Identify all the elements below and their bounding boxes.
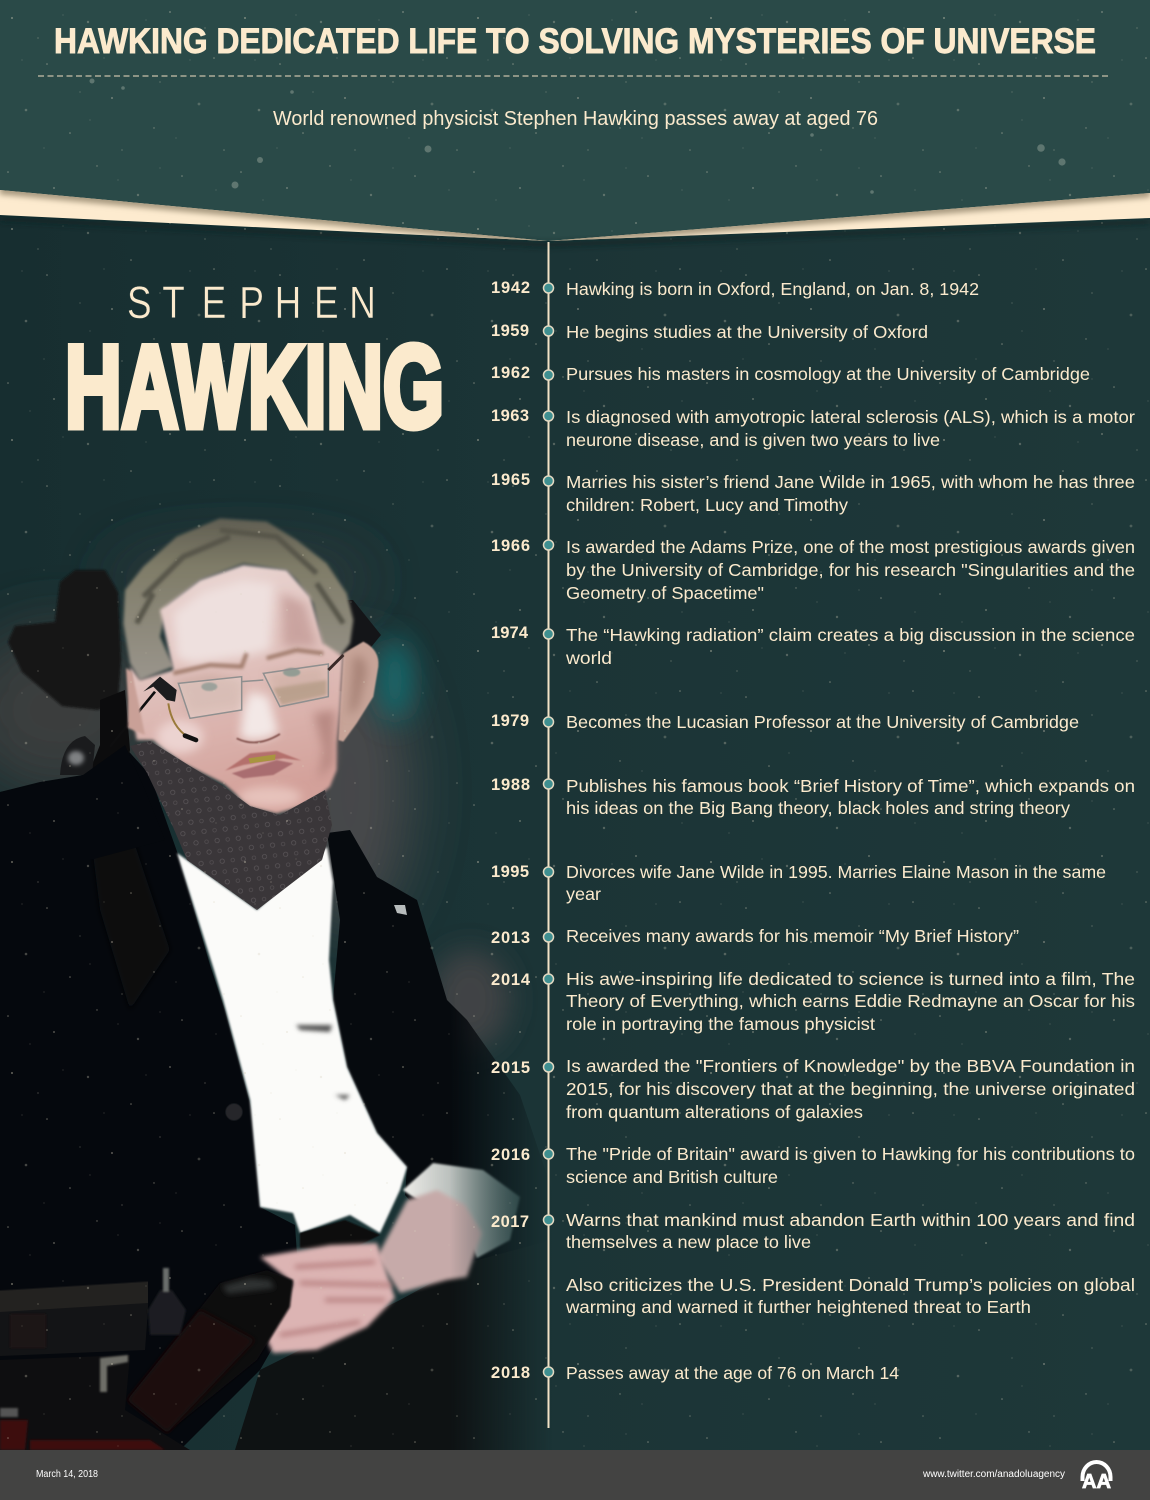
speech sensor and microphone (110, 677, 196, 747)
entry 2017: themselves a new place to live (566, 1232, 811, 1252)
entry 1965: Marries his sister’s friend Jane Wilde in 1965, with whom he has three (566, 472, 1135, 492)
footer date: March 14, 2018 (36, 1469, 98, 1480)
forehead shadow (282, 593, 317, 647)
entry 1959: 1959 (491, 322, 529, 340)
wheelchair control box (0, 1281, 148, 1356)
entry 1995: 1995 (491, 863, 529, 881)
entry 1974: world (565, 648, 612, 668)
entry 2016 (491, 1144, 1135, 1187)
glasses (178, 655, 343, 718)
entry 2015: 2015 (491, 1059, 530, 1077)
footer twitter link: www.twitter.com/anadoluagency (922, 1469, 1065, 1480)
mouth (225, 751, 302, 778)
entry 1979: 1979 (491, 712, 529, 730)
entry 2016: science and British culture (566, 1167, 778, 1187)
hair (123, 518, 353, 680)
entry 1966: Geometry of Spacetime" (566, 583, 764, 603)
blurred backdrop behind portrait (0, 550, 510, 1050)
entry 1995: year (566, 884, 601, 904)
entry 1959: He begins studies at the University of Oxford (566, 322, 928, 342)
left ear edge (126, 668, 145, 735)
entry 2015: 2015, for his discovery that at the beginning, the universe originated (566, 1079, 1135, 1099)
entry 1962: Pursues his masters in cosmology at the University of Cambridge (566, 364, 1090, 384)
shirt (177, 847, 407, 1233)
entry 2016: The "Pride of Britain" award is given to Hawking for his contributions to (566, 1144, 1135, 1164)
entry 1963: Is diagnosed with amyotropic lateral sclerosis (ALS), which is a motor (566, 407, 1135, 427)
decorative large stars (90, 78, 1066, 194)
name heading: STEPHEN (127, 278, 376, 328)
face (130, 565, 343, 813)
entry 2015: Is awarded the "Frontiers of Knowledge" by the BBVA Foundation in (566, 1056, 1135, 1076)
entry 1965 (491, 471, 1135, 515)
shoulder of jacket over scarf (0, 745, 165, 860)
lower right lens shading (273, 680, 327, 705)
entry 1965: 1965 (491, 471, 530, 489)
joystick (148, 1290, 186, 1335)
entry 2016: 2016 (491, 1146, 530, 1164)
entry 1988: 1988 (491, 776, 530, 794)
chrome knob (60, 736, 95, 775)
entry 1966: 1966 (491, 537, 530, 555)
entry 1963: neurone disease, and is given two years to live (566, 430, 940, 450)
hair strands (137, 530, 343, 623)
right headrest (325, 600, 381, 692)
head, traced in crop coordinates (110, 518, 378, 813)
nose (240, 692, 278, 740)
subtitle: World renowned physicist Stephen Hawking passes away at aged 76 (273, 108, 878, 130)
entry 2014: His awe-inspiring life dedicated to science is turned into a film, The (566, 969, 1135, 989)
entry 1988 (491, 776, 1135, 818)
name heading: HAWKING (65, 321, 444, 452)
lapel pin (394, 905, 407, 915)
entry 2014: Theory of Everything, which earns Eddie Redmayne an Oscar for his (566, 991, 1135, 1011)
right ear (338, 642, 378, 742)
trousers (235, 1263, 530, 1450)
entry 1988: Publishes his famous book “Brief History of Time”, which expands on (566, 776, 1135, 796)
body, clothing and hands (0, 745, 552, 1450)
entry 2013: 2013 (491, 929, 530, 947)
entry 1974: 1974 (491, 624, 529, 642)
entry 1995 (491, 862, 1106, 904)
wheelchair armrest (264, 1272, 294, 1346)
entry 2018: Passes away at the age of 76 on March 14 (566, 1363, 899, 1383)
logo: Anadolu Agency: AA (1082, 1471, 1111, 1493)
scarf (130, 741, 332, 910)
entry 1974 (491, 624, 1135, 668)
entry 1963 (491, 407, 1135, 450)
timeline axis (548, 242, 550, 1428)
shirt cuff (403, 1163, 520, 1258)
entry 2017: warming and warned it further heightened threat to Earth (565, 1297, 1031, 1317)
entry 1979: Becomes the Lucasian Professor at the University of Cambridge (566, 712, 1079, 732)
timeline entries (491, 279, 1135, 1383)
eyes (201, 668, 300, 691)
entry 1974: The “Hawking radiation” claim creates a big discussion in the science (566, 625, 1135, 645)
left headrest (8, 570, 121, 710)
entry 1942: Hawking is born in Oxford, England, on Jan. 8, 1942 (566, 279, 979, 299)
chin (238, 786, 302, 807)
entry 1966: Is awarded the Adams Prize, one of the most prestigious awards given (566, 537, 1135, 557)
entry 1963: 1963 (491, 407, 529, 425)
headrest post (90, 690, 130, 770)
forehead highlight (173, 580, 273, 663)
entry 2015 (491, 1056, 1135, 1122)
entry 2014: 2014 (491, 971, 531, 989)
lower hand (260, 1243, 395, 1353)
upper hand (377, 1190, 482, 1293)
name heading (65, 278, 444, 452)
header panel (0, 0, 1150, 242)
ribbon shadow (0, 219, 1150, 245)
jacket (0, 745, 300, 1450)
eyebrows (173, 650, 323, 673)
footer bar (0, 1450, 1150, 1500)
photo: Stephen Hawking portrait (0, 518, 552, 1450)
left cheek (157, 720, 203, 753)
entry 2018: 2018 (491, 1364, 530, 1382)
entry 2017: 2017 (491, 1213, 529, 1231)
entry 1988: his ideas on the Big Bang theory, black holes and string theory (566, 798, 1070, 818)
entry 1942: 1942 (491, 279, 530, 297)
cheek shadow (313, 710, 335, 780)
entry 1995: Divorces wife Jane Wilde in 1995. Marries Elaine Mason in the same (566, 862, 1106, 882)
entry 2014: role in portraying the famous physicist (566, 1014, 875, 1034)
entry 1965: children: Robert, Lucy and Timothy (566, 495, 848, 515)
wheelchair lower frame (0, 1355, 190, 1450)
entry 1966 (491, 537, 1135, 603)
entry 2017: Warns that mankind must abandon Earth within 100 years and find (566, 1210, 1135, 1230)
cream ribbon under header (0, 188, 1150, 241)
entry 2013: Receives many awards for his memoir “My Brief History” (566, 926, 1019, 946)
eye sockets (173, 667, 323, 713)
entry 2015: from quantum alterations of galaxies (566, 1102, 863, 1122)
entry 2014 (491, 969, 1135, 1034)
entry 1966: by the University of Cambridge, for his research "Singularities and the (566, 560, 1135, 580)
entry 2017 (491, 1210, 1135, 1317)
jacket button (226, 1104, 242, 1120)
entry 2017: Also criticizes the U.S. President Donald Trump’s policies on global (566, 1275, 1135, 1295)
entry 1962: 1962 (491, 364, 530, 382)
